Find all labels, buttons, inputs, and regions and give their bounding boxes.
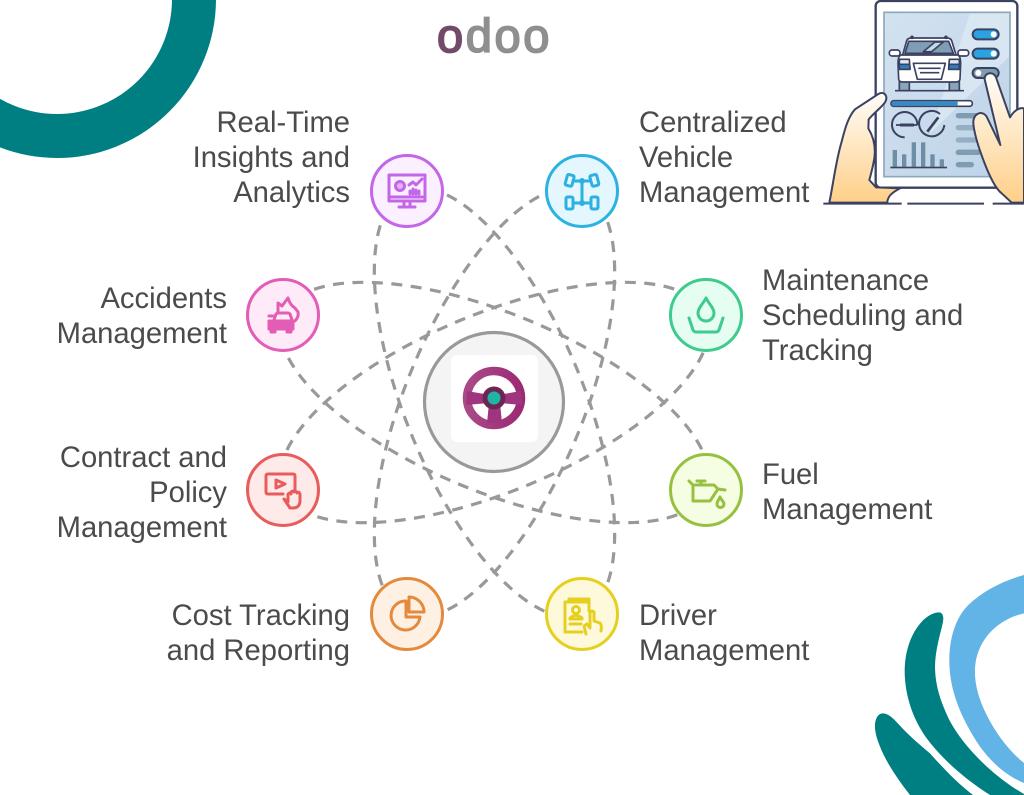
icon: video with hand (266, 474, 300, 508)
label: maintenance: Tracking (762, 335, 873, 367)
decorative teal ring top-left (0, 0, 194, 136)
car (889, 36, 969, 91)
icon: oil can (689, 481, 725, 508)
tablet illustration (823, 1, 1024, 204)
label: driver: Driver (639, 600, 717, 632)
dashed orbits (249, 157, 740, 648)
label: real-time insights: Real-Time (216, 107, 350, 139)
node: cost tracking (372, 578, 442, 650)
toggle switches (973, 29, 999, 78)
node: centralized vehicle (546, 156, 618, 226)
label: fuel: Fuel (762, 459, 819, 491)
decorative waves bottom-right (875, 575, 1024, 795)
label: real-time insights: Analytics (233, 177, 350, 209)
label: driver: Management (639, 635, 809, 667)
label: accidents: Accidents (100, 283, 227, 315)
label: fuel: Management (762, 494, 932, 526)
icon: monitor with charts (389, 175, 425, 207)
node: real-time insights (372, 156, 442, 226)
odoo logo: odoo (437, 9, 552, 62)
label: cost tracking: and Reporting (167, 635, 350, 667)
node: driver (546, 578, 618, 650)
label: centralized vehicle: Centralized (639, 107, 787, 139)
ground line (823, 201, 1024, 207)
central hub (424, 332, 564, 472)
tablet screen (884, 12, 1010, 177)
node: accidents (248, 280, 318, 350)
icon: chassis (565, 174, 599, 209)
right hand (973, 73, 1024, 203)
label: real-time insights: Insights and (193, 142, 350, 174)
label: centralized vehicle: Management (639, 177, 809, 209)
tablet body (876, 1, 1017, 188)
progress bar (891, 101, 972, 106)
node: fuel (670, 454, 742, 526)
label: cost tracking: Cost Tracking (172, 600, 350, 632)
node: contract and policy (248, 454, 318, 526)
label: accidents: Management (57, 318, 227, 350)
icon: steering wheel (466, 371, 522, 425)
gauges (892, 111, 944, 137)
icon: drop in bowl (689, 298, 723, 332)
icon: burning car (269, 298, 298, 332)
label: contract: Management (57, 512, 227, 544)
icon: id card with finger (565, 599, 601, 634)
label: maintenance: Maintenance (762, 265, 929, 297)
icon: pie chart (391, 597, 424, 630)
left hand (829, 93, 900, 203)
node: maintenance (670, 280, 742, 350)
label: centralized vehicle: Vehicle (639, 142, 733, 174)
bar chart (890, 142, 947, 168)
label: contract: Policy (149, 477, 227, 509)
label: contract: Contract and (60, 442, 227, 474)
label: maintenance: Scheduling and (762, 300, 963, 332)
text lines (956, 113, 981, 167)
